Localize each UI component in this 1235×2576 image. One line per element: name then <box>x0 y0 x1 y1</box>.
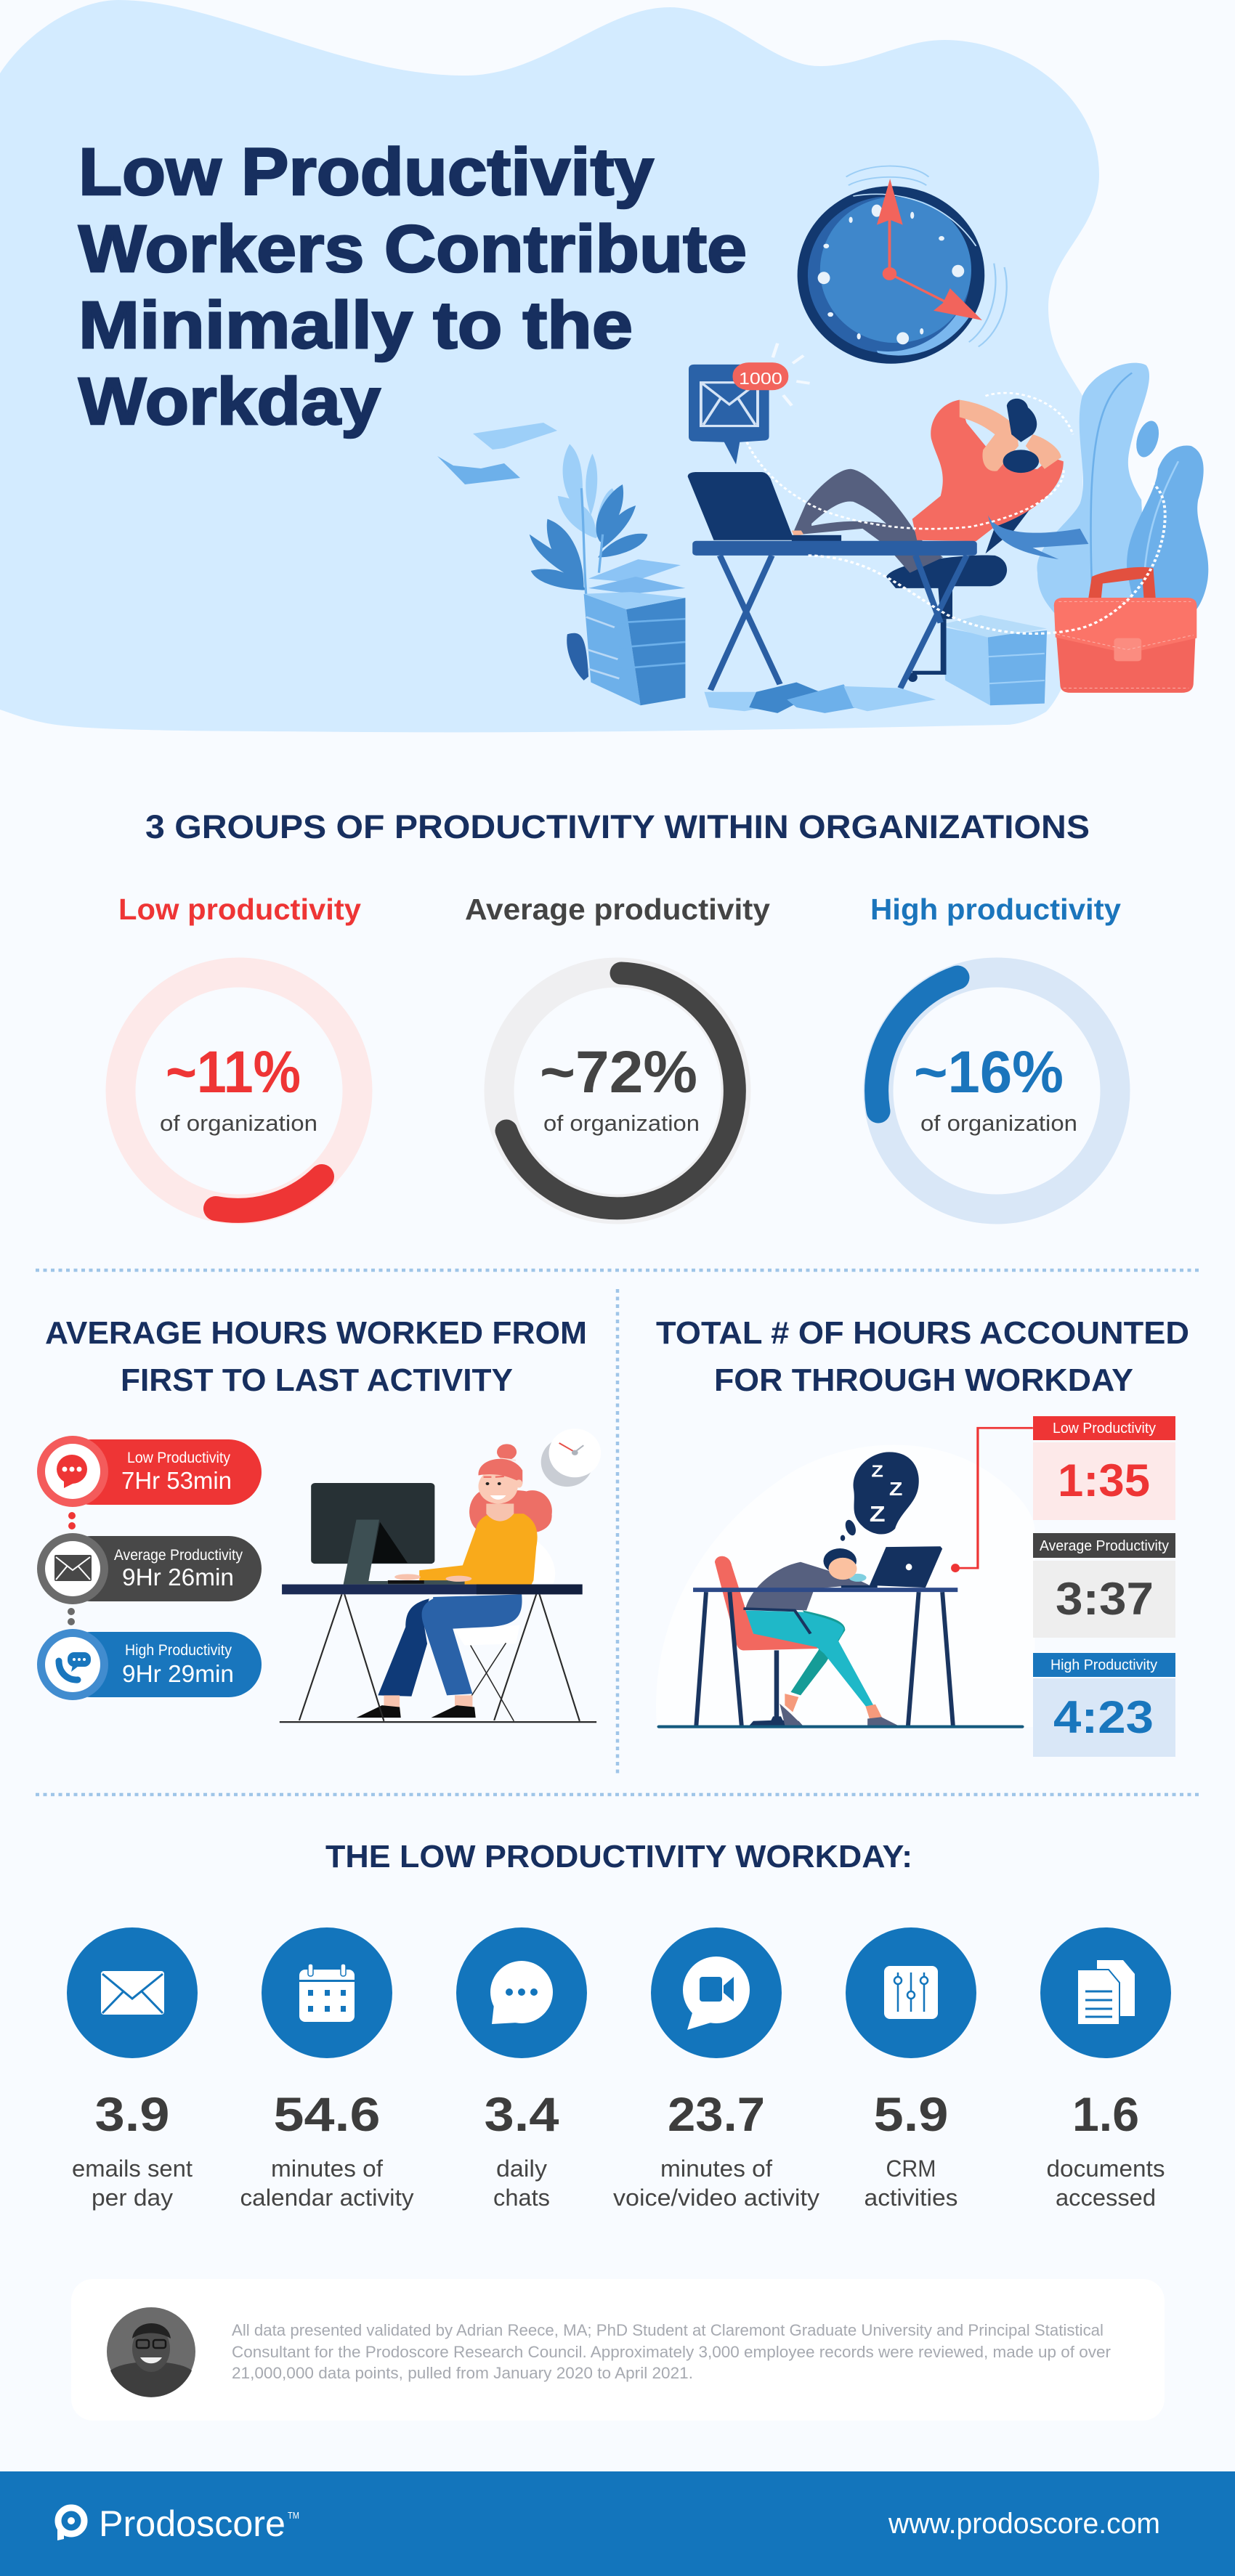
metric: documents: documents <box>1046 2156 1165 2182</box>
metric: calendar: 54.6 <box>273 2087 381 2141</box>
icon: documents <box>1077 1960 1135 2025</box>
metric: emails <box>67 1927 198 2211</box>
group: low productivity: Low productivity <box>118 893 361 926</box>
chair <box>715 1556 822 1726</box>
wall clock <box>798 166 1007 364</box>
group: low productivity <box>118 893 361 1211</box>
metric: calendar <box>240 1927 414 2211</box>
trousers <box>378 1594 522 1707</box>
metric: voice/video: 23.7 <box>668 2087 765 2141</box>
validation note panel: 21,000,000 data points, pulled from January 2020 to April 2021. <box>232 2364 693 2382</box>
metric: voice/video: minutes of <box>660 2156 772 2182</box>
chair <box>453 1540 555 1646</box>
icon: sliders <box>884 1966 938 2019</box>
icon: phone and chat <box>59 1652 91 1680</box>
metric: CRM: activities <box>864 2185 957 2211</box>
hero illustration <box>437 166 1208 713</box>
website: www.prodoscore.com <box>888 2508 1160 2540</box>
right paper stack <box>941 615 1047 705</box>
pill: low productivity hours <box>37 1436 262 1507</box>
metric: documents <box>1040 1927 1171 2211</box>
desk <box>693 1588 957 1726</box>
ring: 72% <box>499 972 736 1209</box>
icon: chat bubble <box>57 1455 87 1488</box>
portrait photo <box>107 2307 195 2397</box>
metric: CRM: CRM <box>886 2156 936 2182</box>
metric: voice/video: voice/video activity <box>613 2185 819 2211</box>
laptop <box>688 472 841 541</box>
floor line <box>280 1720 596 1724</box>
monitor <box>311 1483 434 1585</box>
ring: 16% <box>877 972 1115 1209</box>
title: Workday <box>78 365 381 439</box>
stat box: high productivity: High Productivity <box>1050 1657 1157 1673</box>
footer bar <box>0 2471 1235 2576</box>
stat box: low productivity: Low Productivity <box>1053 1421 1156 1437</box>
connector line <box>951 1428 1033 1572</box>
heading: average hours worked: AVERAGE HOURS WORKED FROM <box>45 1315 587 1351</box>
icon: calendar <box>299 1964 355 2022</box>
thought bubble <box>841 1452 919 1541</box>
pill: high productivity hours: High Productivity <box>125 1642 232 1659</box>
stat box: average productivity: 3:37 <box>1056 1574 1154 1625</box>
metric: emails: emails sent <box>72 2156 193 2182</box>
group: high productivity: ~16% <box>914 1039 1064 1105</box>
back plant <box>530 444 647 680</box>
floor line <box>659 1723 1022 1730</box>
stat box: low productivity: 1:35 <box>1058 1455 1150 1506</box>
wall clock small <box>541 1429 601 1487</box>
validation note panel <box>71 2279 1165 2421</box>
stat box: high productivity: 4:23 <box>1053 1692 1154 1743</box>
desk <box>692 541 977 690</box>
group: average productivity: ~72% <box>540 1039 697 1105</box>
heading: total hours accounted <box>656 1315 1189 1398</box>
metric: calendar: calendar activity <box>240 2185 414 2211</box>
title: Workers Contribute <box>78 212 747 286</box>
title: Low Productivity <box>78 135 654 209</box>
ring: 11% <box>121 972 357 1211</box>
dotted motion path <box>747 393 1165 633</box>
floor papers <box>704 683 936 713</box>
worker body <box>743 1548 898 1726</box>
heading: average hours worked: FIRST TO LAST ACTIVITY <box>121 1362 513 1398</box>
metric: emails: per day <box>92 2185 173 2211</box>
metric: emails: 3.9 <box>94 2087 170 2141</box>
pill: high productivity hours <box>37 1629 262 1700</box>
stat box: average productivity: Average Productivity <box>1040 1538 1169 1554</box>
group: high productivity: of organization <box>920 1110 1077 1136</box>
stat box: high productivity <box>1033 1653 1175 1757</box>
desk legs <box>299 1594 580 1721</box>
group: low productivity: ~11% <box>166 1039 301 1105</box>
head <box>478 1444 522 1521</box>
desk <box>282 1585 583 1594</box>
hair back <box>469 1490 552 1532</box>
pill: low productivity hours: Low Productivity <box>127 1450 230 1466</box>
validation note panel: Consultant for the Prodoscore Research Council. Approximately 3,000 employee records were reviewed, made up of over <box>232 2343 1111 2361</box>
email notification bubble <box>689 344 810 464</box>
group: low productivity: of organization <box>160 1110 317 1136</box>
title <box>78 135 747 439</box>
icon: envelope <box>54 1555 92 1581</box>
pill: average productivity hours: 9Hr 26min <box>122 1564 234 1590</box>
group: average productivity: Average productivity <box>465 893 770 926</box>
icon: video bubble <box>683 1957 750 2030</box>
flying papers <box>437 423 557 484</box>
metric: chats: chats <box>493 2185 550 2211</box>
group: high productivity <box>870 893 1121 1209</box>
logo: Prodoscore <box>99 2503 286 2544</box>
logo: TM <box>288 2510 299 2521</box>
heading: low productivity workday: THE LOW PRODUCTIVITY WORKDAY: <box>325 1839 912 1874</box>
illustration: woman at desk <box>280 1429 601 1722</box>
heading: 3 groups: 3 GROUPS OF PRODUCTIVITY WITHIN ORGANIZATIONS <box>145 808 1090 845</box>
shoes <box>357 1705 476 1718</box>
heading: average hours worked <box>45 1315 587 1398</box>
icon: chat bubble <box>490 1961 553 2024</box>
metric: chats <box>456 1927 587 2211</box>
metric: CRM: 5.9 <box>873 2087 949 2141</box>
pill: average productivity hours: Average Productivity <box>114 1547 243 1564</box>
metric: documents: 1.6 <box>1072 2087 1139 2141</box>
heading: total hours accounted: FOR THROUGH WORKDAY <box>714 1362 1133 1398</box>
white backdrop <box>656 1445 1035 1727</box>
metric: documents: accessed <box>1056 2185 1156 2211</box>
heading: total hours accounted: TOTAL # OF HOURS ACCOUNTED <box>656 1315 1189 1351</box>
relaxing man <box>792 399 1064 573</box>
stat box: low productivity <box>1033 1416 1175 1520</box>
plants on right <box>1037 363 1208 617</box>
title: Minimally to the <box>78 288 633 362</box>
validation note panel: All data presented validated by Adrian Reece, MA; PhD Student at Claremont Graduate University and Principal Statistical <box>232 2321 1104 2339</box>
metric: chats: daily <box>496 2156 547 2182</box>
group: average productivity <box>465 893 770 1209</box>
metric: CRM <box>846 1927 976 2211</box>
group: high productivity: High productivity <box>870 893 1121 926</box>
office chair <box>886 505 1033 682</box>
briefcase <box>1054 567 1196 693</box>
group: average productivity: of organization <box>543 1110 700 1136</box>
hero background blob <box>0 0 1099 732</box>
stat box: average productivity <box>1033 1533 1175 1638</box>
pill: average productivity hours <box>37 1533 262 1604</box>
metric: chats: 3.4 <box>484 2087 559 2141</box>
connector dots <box>68 1512 76 1625</box>
sweater <box>419 1513 538 1585</box>
email notification bubble: 1000 <box>739 368 782 388</box>
pill: low productivity hours: 7Hr 53min <box>121 1467 232 1494</box>
illustration: sleeping worker <box>656 1428 1035 1727</box>
laptop <box>841 1546 942 1588</box>
thought bubble: Z <box>889 1479 902 1499</box>
metric: voice/video <box>613 1927 819 2211</box>
pill: high productivity hours: 9Hr 29min <box>122 1660 234 1687</box>
metric: calendar: minutes of <box>271 2156 383 2182</box>
icon: envelope <box>101 1971 164 2015</box>
left paper stack <box>584 559 685 705</box>
keyboard and hands <box>388 1574 471 1585</box>
thought bubble: Z <box>871 1463 883 1481</box>
falling paper <box>988 515 1088 559</box>
thought bubble: Z <box>870 1502 886 1527</box>
